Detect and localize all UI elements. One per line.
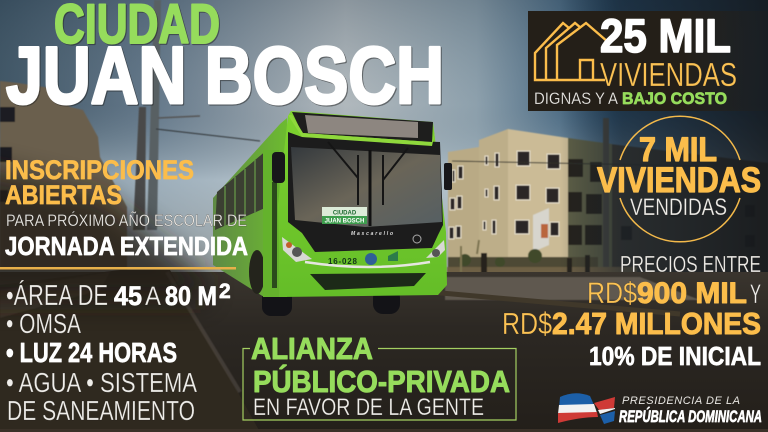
panel: school enrolment: JORNADA EXTENDIDA xyxy=(5,231,248,261)
background: left building and poles xyxy=(0,0,260,270)
background: apartment buildings xyxy=(447,118,768,280)
wheels xyxy=(262,285,400,316)
background: road xyxy=(0,270,768,432)
windshield xyxy=(291,147,442,227)
route sign: CIUDAD xyxy=(333,210,357,216)
panel: precios: 900 MIL xyxy=(637,277,747,310)
panel: 25 mil viviendas: BAJO COSTO xyxy=(622,89,727,108)
background: sky xyxy=(0,0,768,300)
panel: 25 mil viviendas: DIGNAS Y A xyxy=(534,89,619,108)
panel: 25 mil viviendas: 25 MIL xyxy=(600,9,731,62)
mirrors xyxy=(272,152,285,183)
panel: precios: Y xyxy=(750,279,761,309)
logo: presidencia xyxy=(558,393,762,426)
panel: school enrolment: ABIERTAS xyxy=(5,180,122,210)
panel: school enrolment: PARA PRÓXIMO AÑO ESCOLAR DE xyxy=(6,211,247,230)
panel: alianza publico-privada: ALIANZA xyxy=(251,331,373,366)
panel: 25 mil viviendas xyxy=(528,9,768,111)
icon: flag xyxy=(558,393,615,424)
panel: 7 mil viviendas vendidas xyxy=(597,116,761,242)
panel: alianza publico-privada: PÚBLICO-PRIVADA xyxy=(253,363,510,399)
destination sign xyxy=(292,112,433,142)
bus side xyxy=(213,118,287,297)
bus xyxy=(213,111,452,316)
panel: precios xyxy=(502,251,761,371)
billboard xyxy=(533,208,549,252)
icon: houses xyxy=(535,23,608,80)
panel: features list: • OMSA xyxy=(6,308,81,339)
panel: 7 mil viviendas vendidas: 7 MIL xyxy=(639,131,717,169)
panel: alianza publico-privada: EN FAVOR DE LA GENTE xyxy=(253,394,484,421)
title xyxy=(6,0,445,122)
panel: school enrolment xyxy=(0,155,248,270)
panel: features list: • LUZ 24 HORAS xyxy=(6,337,177,368)
panel: precios: RD$ xyxy=(502,306,552,341)
route sign xyxy=(322,207,367,224)
panel: features list: 45 xyxy=(114,281,142,311)
bus front xyxy=(278,111,447,297)
panel: features list: 2 xyxy=(219,280,231,303)
panel: features list: •ÁREA DE xyxy=(6,279,108,312)
panel: features list: 80 M xyxy=(165,281,217,311)
panel: alianza publico-privada xyxy=(243,331,516,421)
left dark overlay xyxy=(0,165,205,300)
logo: presidencia: PRESIDENCIA DE LA xyxy=(622,395,740,407)
panel: features list: DE SANEAMIENTO xyxy=(7,395,195,426)
right darkening overlay xyxy=(560,0,768,280)
lights and grille xyxy=(282,237,312,262)
panel: school enrolment: INSCRIPCIONES xyxy=(5,155,194,185)
panel: 7 mil viviendas vendidas: VENDIDAS xyxy=(630,194,727,221)
route sign: JUAN BOSCH xyxy=(325,218,364,224)
bus: 16-028 xyxy=(328,257,358,266)
panel: features list: • AGUA • SISTEMA xyxy=(6,367,197,398)
title: JUAN BOSCH xyxy=(7,32,445,122)
panel: precios: RD$ xyxy=(587,277,637,310)
bus: Mascarello xyxy=(351,231,393,237)
panel: features list xyxy=(6,279,231,426)
panel: features list: A xyxy=(145,281,161,311)
title: JUAN BOSCH xyxy=(6,31,444,121)
